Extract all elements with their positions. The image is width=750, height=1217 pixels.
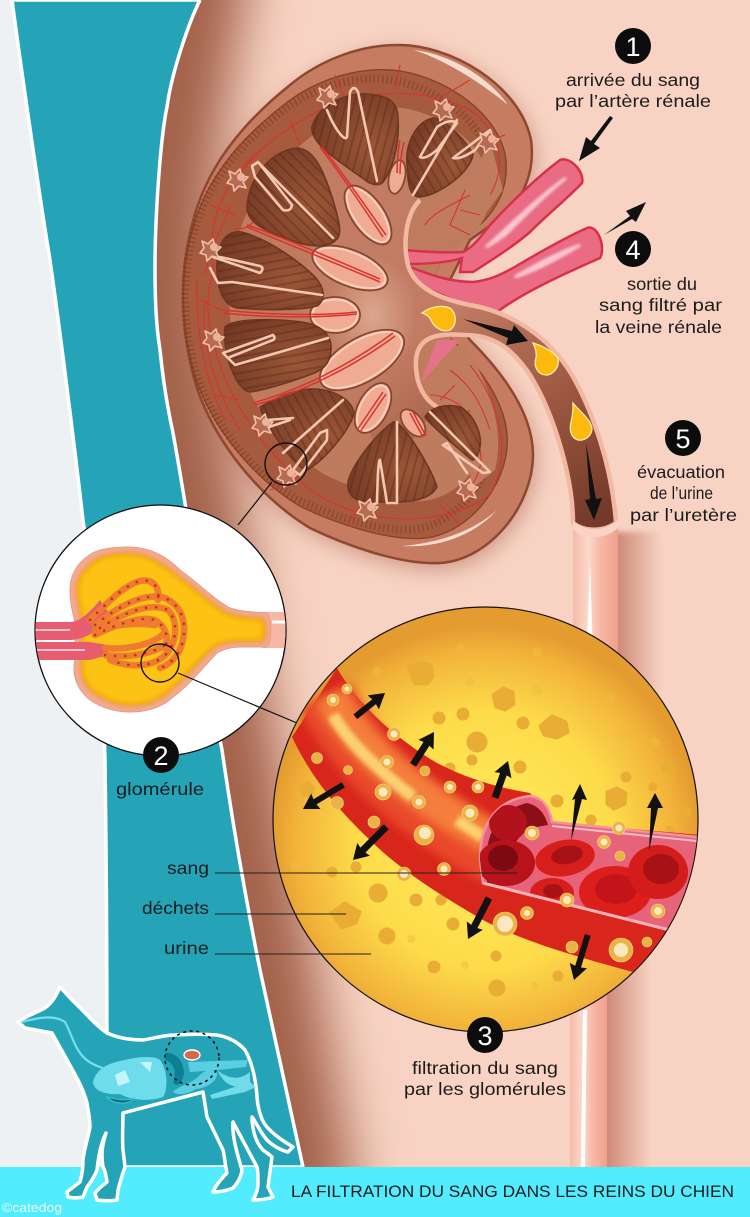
capillary loops: [90, 581, 184, 668]
text: step 4: la veine rénale: [595, 317, 722, 337]
ureter lower tube: [570, 520, 618, 1167]
vessel inner shading: [325, 695, 500, 858]
pale cortex lobes beside hilum: [410, 140, 503, 490]
badge 2: [143, 737, 179, 773]
pale branch under pelvis: [420, 340, 460, 384]
teal band: [12, 0, 310, 1167]
tubules: [210, 88, 490, 510]
text: step 1: par l’artère rénale: [555, 91, 711, 111]
lobe vessels: [223, 140, 426, 437]
badge 1: [615, 28, 651, 64]
papillae pale rims: [309, 181, 410, 436]
efferent tube: [262, 612, 286, 648]
inner medulla area: [229, 107, 492, 501]
badge 5: 5: [675, 424, 691, 454]
panel: filtration circle: [273, 607, 700, 1032]
text: step 5: évacuation: [637, 462, 725, 482]
text: step 3: [404, 1058, 566, 1099]
badge 1: 1: [625, 32, 641, 62]
particle cores: [330, 686, 662, 957]
label: sang: sang: [167, 858, 209, 878]
artery: [405, 159, 582, 272]
arrow: out of renal vein: [604, 202, 646, 235]
capsule highlights: [402, 50, 508, 546]
icon: dog silhouette with organs: [18, 987, 293, 1201]
dog kidney: [184, 1050, 200, 1060]
pelvis and ureter: [300, 130, 616, 530]
vein: [405, 228, 602, 312]
capillaries: [197, 65, 505, 525]
dog intestines: [173, 1060, 248, 1094]
blood vessel wall: [292, 668, 697, 972]
dog lungs: [93, 1057, 166, 1100]
badge 4: [615, 231, 651, 267]
kidney shadow: [186, 51, 536, 569]
arrow: down ureter: [585, 443, 602, 520]
text: step 3: filtration du sang: [412, 1058, 558, 1078]
badge 2: 2: [153, 741, 169, 771]
capsule: [183, 45, 533, 563]
text: step 4: [595, 274, 722, 337]
text: step 5: par l’uretère: [630, 505, 737, 525]
text: step 4: sang filtré par: [599, 295, 722, 315]
text: step 1: [555, 70, 711, 111]
arrow: through ureter: [463, 319, 528, 345]
urine drop 2: [533, 343, 558, 375]
arrow: into renal artery: [579, 116, 613, 161]
badge 3: 3: [477, 1021, 493, 1051]
pointer line: kidney to glomerulus: [238, 482, 272, 525]
badge 5: [665, 420, 701, 456]
text: step 1: arrivée du sang: [566, 70, 700, 90]
vessel lumen: [477, 796, 697, 937]
credit: ©catedog: [2, 1200, 62, 1215]
pointer line: glomerulus to filtration: [178, 673, 297, 723]
waste particles in urine: [300, 662, 690, 995]
red blood cells: [477, 805, 688, 918]
zoom ring on glomerulus: [141, 644, 179, 682]
text: step 5: [630, 462, 737, 525]
badge 4: 4: [625, 235, 641, 265]
faint particles in urine: [290, 643, 660, 1014]
cortex: [184, 70, 507, 539]
text: step 5: de l’urine: [650, 483, 713, 503]
label: urine: urine: [164, 938, 209, 958]
yellow capsular space: [77, 554, 265, 705]
papillae lobes: [306, 159, 430, 441]
badge 3: [467, 1017, 503, 1053]
particles in vessel: [312, 684, 665, 962]
title bar: [0, 1167, 750, 1217]
pyramids: [217, 94, 480, 502]
filtration arrows: [298, 686, 663, 983]
cortex radial stripes: [185, 79, 493, 530]
leader line: urine: [215, 953, 371, 955]
label: déchets: déchets: [142, 898, 209, 918]
kidney: [183, 45, 618, 569]
leader line: déchets: [215, 913, 346, 915]
dog mouth and throat: [22, 1017, 103, 1068]
body panel: pink skin with brown shaded edge: [155, 0, 750, 1217]
pyramid stripes: [217, 94, 480, 502]
text: step 2: glomérule: [116, 779, 204, 799]
glomeruli: [200, 86, 499, 521]
panel: glomerulus circle: [30, 505, 290, 756]
dog spleen: [107, 1097, 134, 1103]
dog liver: [165, 1053, 184, 1085]
zoom ring on kidney: [265, 443, 307, 485]
urine drop 1: [422, 306, 455, 331]
text: step 4: sortie du: [627, 274, 697, 294]
urine drop 3: [570, 403, 592, 440]
title: LA FILTRATION DU SANG DANS LES REINS DU CHIEN: [291, 1182, 734, 1201]
text: step 3: par les glomérules: [404, 1079, 566, 1099]
ureter end: [573, 520, 618, 537]
Bowman capsule wall: [70, 547, 271, 712]
leader line: sang: [215, 872, 517, 874]
afferent vessels: [30, 600, 110, 660]
dotted ring: [165, 1031, 219, 1085]
